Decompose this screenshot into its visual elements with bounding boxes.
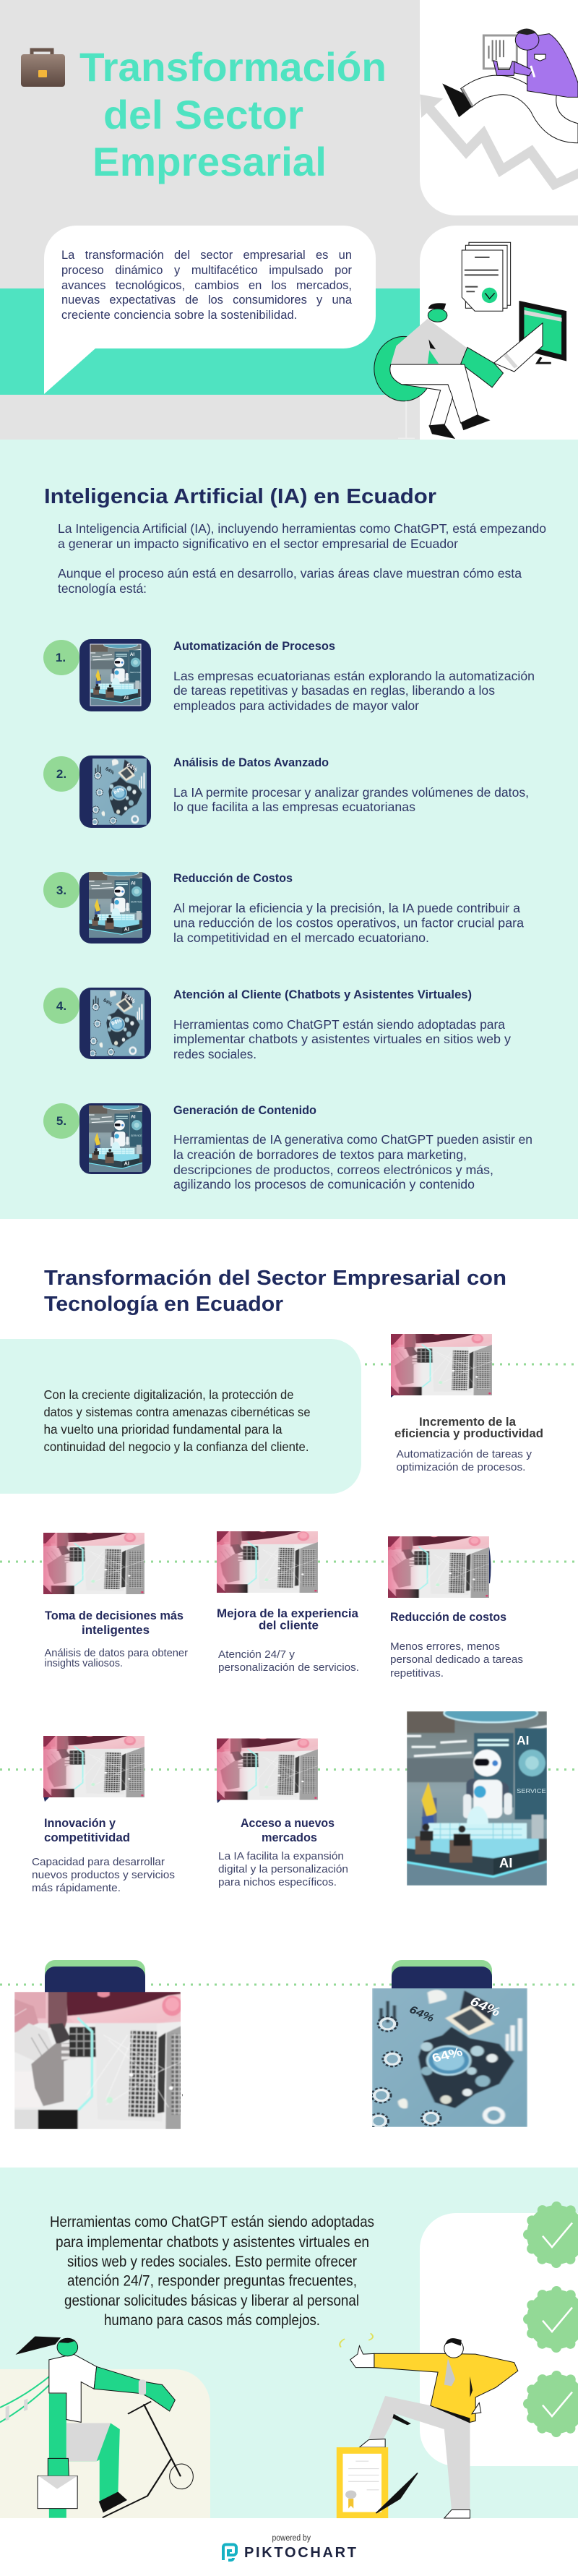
card: experiencia del cliente: del cliente [259,1618,319,1633]
card: innovación: nuevos productos y servicios [32,1869,175,1881]
card: experiencia del cliente: Mejora de la experiencia [217,1606,359,1620]
list item 3: la competitividad en el mercado ecuatoriano. [173,930,429,945]
list item 5: la creación de borradores de textos para marketing, [173,1147,467,1162]
title [79,44,387,184]
list item 1 [43,639,535,713]
heading: transformación con tecnología: Tecnología en Ecuador [44,1293,283,1316]
list item 1: de tareas repetitivas y basadas en reglas, liberando a los [173,683,495,698]
list item 2: lo que facilita a las empresas ecuatorianas [173,800,415,814]
list item 3 [43,869,524,945]
image card: datos y engranajes [370,1960,527,2128]
panel: lower right illustration [420,226,578,440]
panel: ciberseguridad: datos y sistemas contra amenazas cibernéticas se [43,1405,311,1419]
chatbots text: gestionar solicitudes básicas y liberar al personal [64,2292,359,2309]
card: nuevos mercados: para nichos específicos. [218,1876,337,1888]
card: experiencia del cliente: Atención 24/7 y [218,1648,296,1661]
list item 2: Análisis de Datos Avanzado [173,756,329,769]
chatbots text: atención 24/7, responder preguntas frecuentes, [67,2272,357,2289]
list item 3: Reducción de Costos [173,871,293,885]
image card: manos y laptop [14,1960,197,2129]
chatbots text [50,2213,374,2329]
illustration: man giving thumbs up with certificate [337,2333,518,2518]
intro paragraph in speech bubble: proceso dinámico y multifacético impulsado por [61,264,352,277]
card: nuevos mercados: mercados [262,1831,317,1844]
list item 4: redes sociales. [173,1047,256,1061]
list item 3: 3. [56,883,66,897]
illustration: businessman in purple on rising arrow [420,29,578,184]
card: incremento de la eficiencia: Incremento de la [419,1415,517,1429]
card: toma de decisiones: insights valiosos. [45,1657,123,1669]
intro text: tecnología está: [58,581,147,596]
panel: ciberseguridad [0,1339,361,1494]
card: incremento de la eficiencia: Automatización de tareas y [396,1448,532,1460]
list item 5 [43,1103,532,1191]
image card: manos y laptop: , [181,2089,184,2097]
intro paragraph in speech bubble [61,249,353,322]
list item 1: 1. [56,651,66,664]
list item 2: 2. [56,767,66,781]
list item 1: Automatización de Procesos [173,639,335,653]
list item 3: Al mejorar la eficiencia y la precisión, la IA puede contribuir a [173,901,520,915]
card: nuevos mercados: Acceso a nuevos [241,1816,335,1830]
list item 5: agilizando los procesos de comunicación y contenido [173,1177,475,1191]
chatbots text: humano para casos más complejos. [104,2311,320,2329]
heading: IA en Ecuador: Inteligencia Artificial (IA) en Ecuador [44,485,436,508]
card: innovación: Capacidad para desarrollar [32,1856,165,1868]
card: incremento de la eficiencia [384,1332,543,1473]
list item 5: descripciones de productos, correos electrónicos y más, [173,1163,493,1177]
intro paragraph in speech bubble: La transformación del sector empresarial es un [61,249,352,262]
intro text: La Inteligencia Artificial (IA), incluyendo herramientas como ChatGPT, está empezando [58,521,546,536]
list item 1: Las empresas ecuatorianas están explorando la automatización [173,669,535,683]
panel: top right illustration [420,0,578,215]
chatbots text: sitios web y redes sociales. Esto permite ofrecer [67,2253,357,2270]
icon: check badge 2 [527,2290,578,2349]
list item 4: Herramientas como ChatGPT están siendo adoptadas para [173,1017,505,1032]
chatbots text: para implementar chatbots y asistentes virtuales en [56,2233,369,2251]
section background: IA en Ecuador [0,440,578,1219]
card: toma de decisiones: Toma de decisiones más [45,1609,184,1622]
list item 4: Atención al Cliente (Chatbots y Asistentes Virtuales) [173,988,472,1001]
footer credit: powered by [272,2534,311,2543]
list item 5: 5. [56,1114,66,1128]
intro text [58,521,546,596]
icon: monitor [522,304,564,363]
title: Empresarial [92,139,327,184]
illustration: seated man reviewing documents [374,242,564,439]
card: reducción de costos: Reducción de costos [390,1610,506,1624]
card: nuevos mercados: digital y la personalización [218,1863,348,1875]
image: robot en sala de reuniones [407,1711,547,1886]
card: experiencia del cliente [210,1530,359,1674]
card: experiencia del cliente: personalización de servicios. [218,1661,359,1674]
footer credit: PIKTOCHART [244,2545,356,2561]
title: del Sector [103,92,303,137]
title: Transformación [79,44,387,90]
heading: transformación con tecnología [44,1267,506,1316]
card: reducción de costos: repetitivas. [390,1667,444,1679]
card: innovación: competitividad [44,1831,130,1844]
intro paragraph in speech bubble: avances tecnológicos, cambios en los mercados, [61,279,352,292]
heading: transformación con tecnología: Transformación del Sector Empresarial con [44,1267,506,1290]
panel: ciberseguridad: continuidad del negocio y la confianza del cliente. [43,1439,309,1454]
intro text: Aunque el proceso aún está en desarrollo, varias áreas clave muestran cómo esta [58,566,522,581]
list item 4: implementar chatbots y asistentes virtuales en sitios web y [173,1032,511,1046]
icon: check badge 1 [527,2205,578,2264]
card: incremento de la eficiencia: optimización de procesos. [396,1461,526,1473]
card: toma de decisiones [37,1531,188,1669]
panel: white backdrop [420,2213,578,2466]
card: toma de decisiones: inteligentes [82,1623,150,1637]
speech bubble [44,226,376,394]
panel: ciberseguridad: ha vuelto una prioridad fundamental para la [43,1422,282,1437]
list item 5: Herramientas de IA generativa como ChatGPT pueden asistir en [173,1132,532,1147]
list item 5: Generación de Contenido [173,1103,316,1117]
list item 2: La IA permite procesar y analizar grandes volúmenes de datos, [173,785,529,800]
panel: cream backdrop [0,2369,210,2518]
icon: check badge 3 [527,2374,578,2434]
list item 2 [43,756,529,828]
card: reducción de costos: Menos errores, menos [390,1640,500,1653]
card: nuevos mercados [210,1737,348,1888]
illustration: woman on scooter [0,2337,193,2518]
panel: ciberseguridad: Con la creciente digitalización, la protección de [43,1387,293,1402]
card: reducción de costos [381,1535,523,1679]
card: reducción de costos: personal dedicado a tareas [390,1653,523,1666]
card: innovación: Innovación y [44,1816,116,1830]
intro paragraph in speech bubble: nuevas expectativas de los consumidores y una [61,294,352,307]
chatbots text: Herramientas como ChatGPT están siendo adoptadas [50,2213,374,2230]
header background [0,0,578,440]
teal band [0,288,434,395]
list item 3: una reducción de los costos operativos, un factor crucial para [173,915,524,930]
list item 1: empleados para actividades de mayor valor [173,698,419,713]
section background: chatbots [0,2168,578,2518]
intro paragraph in speech bubble: creciente conciencia sobre la sostenibilidad. [61,309,297,322]
icon: piktochart logo [223,2545,236,2560]
card: innovación: más rápidamente. [32,1882,121,1894]
card: toma de decisiones: Análisis de datos para obtener [45,1647,188,1659]
list item 4: 4. [56,999,66,1013]
list item 4 [43,988,511,1061]
card: innovación [32,1734,175,1894]
icon: document stack [462,242,511,311]
icon: briefcase [21,50,65,87]
card: nuevos mercados: La IA facilita la expansión [218,1850,344,1862]
intro text: a generar un impacto significativo en el sector empresarial de Ecuador [58,536,458,551]
card: incremento de la eficiencia: eficiencia y productividad [394,1426,543,1440]
footer credit [223,2534,356,2561]
